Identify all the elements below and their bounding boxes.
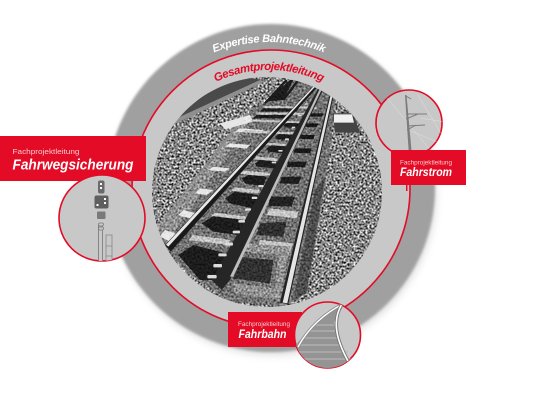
label: Fahrstrom: Fahrstrom xyxy=(400,165,452,179)
concrete rungs on the left xyxy=(160,115,263,243)
label: Fahrstrom xyxy=(391,150,466,185)
rack rail xyxy=(212,88,323,290)
heading: Expertise Bahntechnik: Expertise Bahntechnik xyxy=(212,34,326,52)
dark sleeper bays left xyxy=(178,80,302,280)
gravel bays right xyxy=(233,113,323,283)
infographic xyxy=(0,22,466,369)
slab edge right xyxy=(293,177,325,300)
icon: catenary mast xyxy=(387,95,442,150)
circle: Fahrwegsicherung signal xyxy=(59,175,145,265)
inspection cover xyxy=(333,113,360,133)
rail right xyxy=(280,93,334,304)
rails and rack xyxy=(165,80,360,304)
slab and sleepers xyxy=(157,73,337,307)
label: Fahrstrom: Fachprojektleitung xyxy=(400,160,452,166)
label: Fahrwegsicherung xyxy=(0,136,146,181)
red connector xyxy=(406,185,408,191)
rack teeth xyxy=(207,103,308,278)
outer ring: Expertise Bahntechnik xyxy=(107,24,436,355)
label: Fahrwegsicherung: Fachprojektleitung xyxy=(12,147,80,156)
label: Fahrbahn: Fahrbahn xyxy=(238,327,286,341)
slab texture xyxy=(158,80,336,306)
circle: Fahrbahn track xyxy=(294,302,360,372)
label: Fahrbahn xyxy=(228,312,302,347)
concrete slab xyxy=(157,80,337,307)
photo: rack railway track xyxy=(150,73,385,310)
heading: Gesamtprojektleitung: Gesamtprojektleitung xyxy=(214,62,324,83)
circle: Fahrstrom mast xyxy=(376,90,445,156)
light sleeper bars xyxy=(188,106,317,252)
verge top left xyxy=(174,78,265,125)
label: Fahrwegsicherung: Fahrwegsicherung xyxy=(12,158,134,174)
rail left xyxy=(165,84,318,252)
icon: curved track xyxy=(296,304,351,368)
branch tracks at top xyxy=(265,80,298,103)
icon: signal mast xyxy=(94,180,112,265)
gravel ballast xyxy=(150,75,385,310)
inner ring: Gesamtprojektleitung xyxy=(132,50,410,328)
label: Fahrbahn: Fachprojektleitung xyxy=(238,321,290,328)
